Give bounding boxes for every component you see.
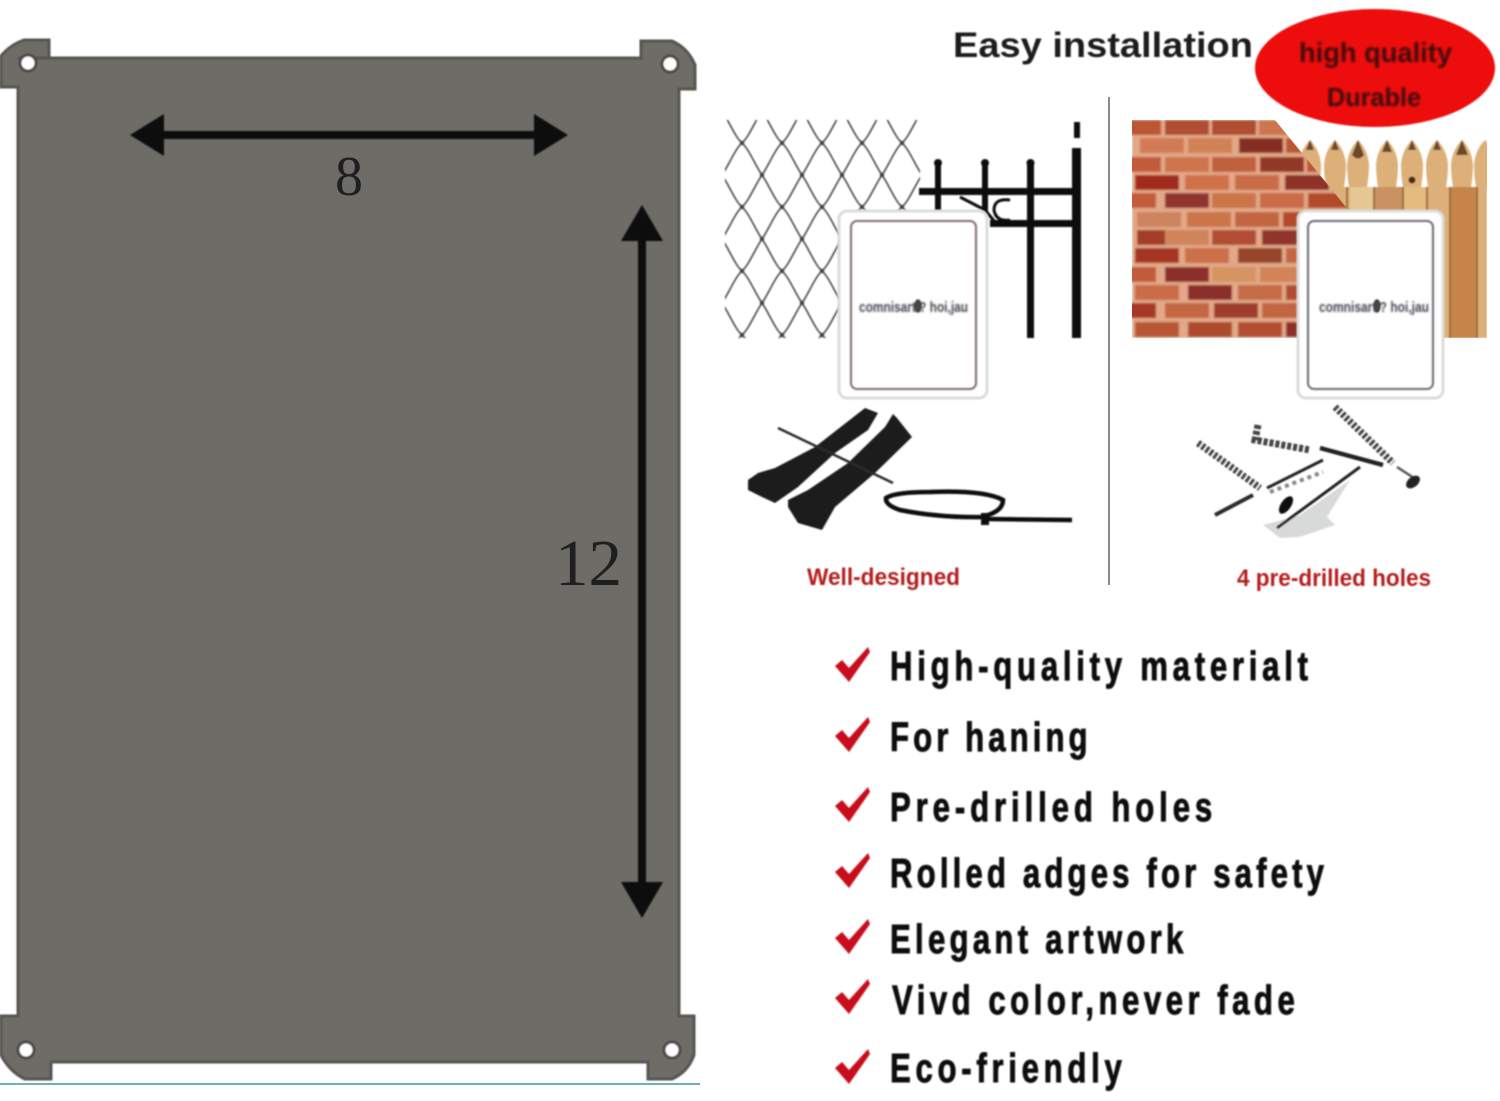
chain-link fence [725,120,920,338]
badge: high quality durable: high quality [1299,37,1452,68]
item: eco-friendly: Eco-friendly [890,1045,1122,1091]
caption: well-designed: Well-designed [807,564,960,591]
wooden fence [1296,140,1496,338]
small sign on wall: comnisart ? hoi,jau [1319,299,1429,316]
width label: 8 [335,146,363,208]
caption: 4 pre-drilled holes: 4 pre-drilled holes [1237,565,1431,592]
panel divider [1108,97,1110,585]
feature list [835,643,1325,1091]
small sign on wall [1298,211,1443,398]
small sign on fence: comnisart ? hoi,jau [859,299,968,316]
panel: four pre-drilled holes on wall and wood fence [1112,120,1496,592]
brick wall [1132,120,1348,338]
item: elegant artwork: Elegant artwork [890,916,1184,962]
badge: high quality durable [1255,9,1495,127]
item: high-quality material: High-quality materialt [890,643,1308,689]
width arrow [130,114,568,156]
bottom edge line [0,1083,700,1085]
panel: well-designed mounting on wire and railing fences [725,120,1081,591]
iron railing [919,122,1081,338]
badge: high quality durable: Durable [1327,82,1421,112]
item: rolled edges: Rolled adges for safety [890,850,1325,896]
small sign on fence [839,211,987,398]
height label: 12 [555,527,622,600]
item: vivid color: Vivd color,never fade [892,977,1295,1023]
sign plate [1,40,695,1079]
height arrow [621,205,663,918]
heading: easy installation: Easy installation [953,26,1253,65]
panel: sign plate with dimensions [0,40,700,1085]
item: for hanging: For haning [890,714,1088,760]
screws [1198,407,1422,538]
item: pre-drilled holes: Pre-drilled holes [890,784,1212,830]
cable ties [748,408,1072,530]
